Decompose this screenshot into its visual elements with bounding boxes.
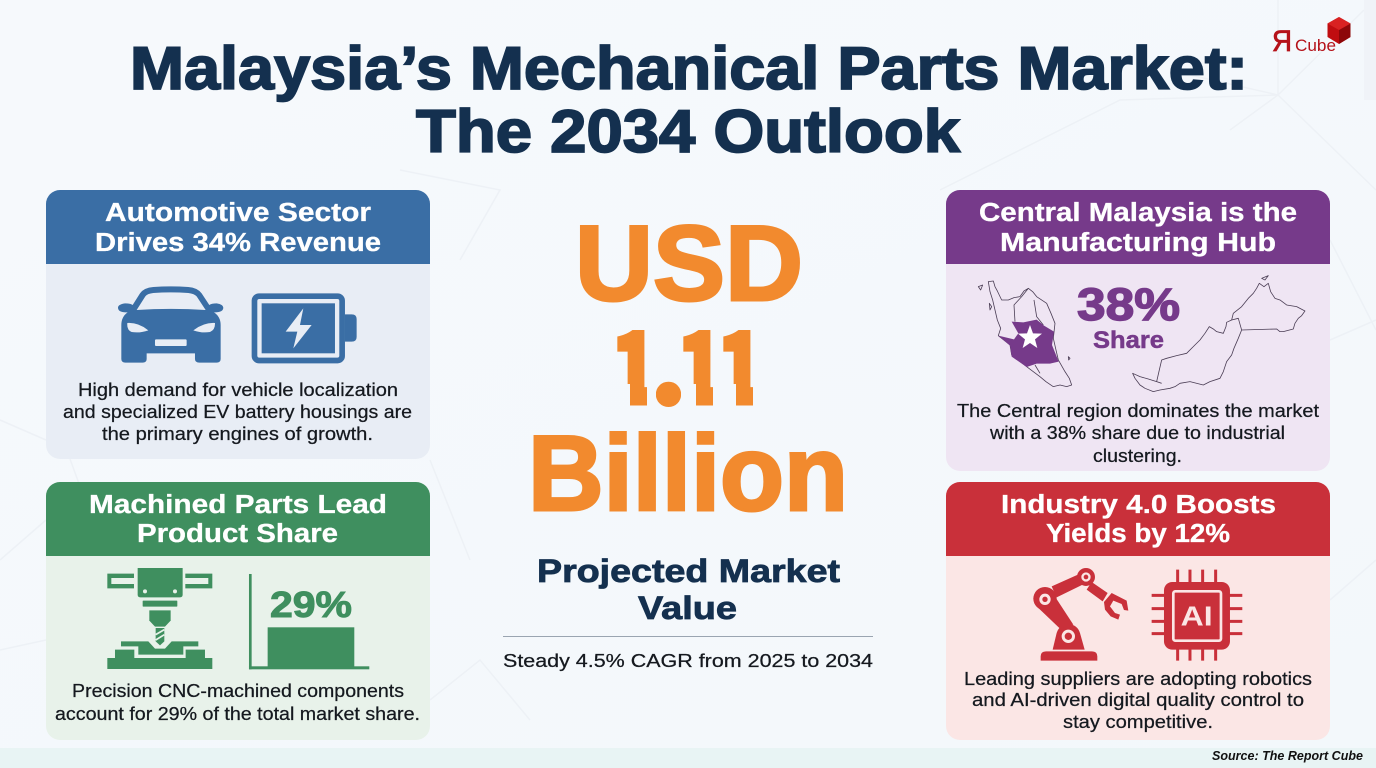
- headline figure: USD 1.11 Billion: 1: [718, 293, 763, 430]
- map: east malaysia: [1133, 276, 1305, 392]
- text: central description: with a 38% share due to industrial: [989, 422, 1285, 443]
- stat: 38% share: 38%: [1077, 279, 1180, 330]
- heading: industry 4.0: Yields by 12%: [1046, 520, 1230, 548]
- panel: central malaysia: [946, 190, 1330, 471]
- title: Malaysia’s Mechanical Parts Market:: [130, 35, 1248, 102]
- heading: machined parts: Product Share: [137, 520, 338, 548]
- subheading: projected market value: [537, 553, 840, 626]
- text: automotive description: the primary engines of growth.: [102, 423, 373, 444]
- footer band: [0, 748, 1376, 768]
- subheading: projected market value: Projected Market: [537, 553, 840, 589]
- headline figure: USD 1.11 Billion: 1: [678, 293, 723, 430]
- icon: battery: [252, 293, 357, 363]
- title: The 2034 Outlook: [416, 98, 961, 165]
- heading: machined parts: [89, 491, 387, 548]
- heading: industry 4.0: [1001, 491, 1276, 548]
- chart: 29% bar: 29%: [270, 584, 352, 625]
- subheading: projected market value: Value: [638, 590, 737, 626]
- text: automotive description: High demand for vehicle localization: [78, 379, 398, 400]
- text: machined description: [55, 680, 420, 724]
- logo: RCube: Cube: [1295, 36, 1336, 55]
- text: industry description: Leading suppliers are adopting robotics: [964, 668, 1312, 689]
- heading: central malaysia: Central Malaysia is the: [979, 199, 1297, 227]
- logo: RCube: Я: [1272, 25, 1292, 58]
- text: central description: [957, 400, 1319, 466]
- text: automotive description: [63, 379, 412, 444]
- heading: machined parts: Machined Parts Lead: [89, 491, 387, 519]
- text: machined description: Precision CNC-machined components: [72, 680, 404, 701]
- heading: automotive: Automotive Sector: [105, 199, 371, 227]
- text: industry description: and AI-driven digital quality control to: [972, 689, 1304, 710]
- panel: machined parts: [46, 482, 430, 740]
- heading: automotive: [95, 199, 381, 257]
- headline figure: USD 1.11 Billion: Billion: [528, 413, 848, 533]
- panel: automotive sector: [46, 190, 430, 459]
- headline figure: USD 1.11 Billion: 1: [612, 293, 657, 430]
- text: industry description: stay competitive.: [1063, 711, 1213, 732]
- headline figure: USD 1.11 Billion: [534, 224, 843, 512]
- source: Source: The Report Cube: [1212, 749, 1363, 763]
- heading: central malaysia: [979, 199, 1297, 257]
- headline figure: USD 1.11 Billion: .: [652, 293, 684, 430]
- map: peninsular malaysia: [978, 281, 1072, 387]
- text: automotive description: and specialized EV battery housings are: [63, 401, 412, 422]
- icon: car: [118, 286, 223, 363]
- heading: central malaysia: Manufacturing Hub: [1000, 229, 1276, 257]
- text: central description: The Central region dominates the market: [957, 400, 1319, 421]
- text: industry description: [964, 668, 1312, 732]
- text: CAGR: Steady 4.5% CAGR from 2025 to 2034: [503, 650, 873, 671]
- icon: AI chip: [1152, 570, 1242, 661]
- stat: 38% share: Share: [1093, 327, 1164, 354]
- heading: industry 4.0: Industry 4.0 Boosts: [1001, 491, 1276, 519]
- heading: automotive: Drives 34% Revenue: [95, 229, 381, 257]
- text: machined description: account for 29% of the total market share.: [55, 703, 420, 724]
- icon: AI chip: AI: [1181, 601, 1213, 632]
- text: central description: clustering.: [1093, 445, 1182, 466]
- headline figure: USD 1.11 Billion: USD: [575, 203, 803, 323]
- stat: 38% share: [1077, 279, 1180, 354]
- logo: RCube: [1272, 17, 1350, 58]
- title: [130, 35, 1248, 165]
- icon: CNC machine: [107, 568, 212, 669]
- panel: industry 4.0: [946, 482, 1330, 740]
- icon: robot arm: [1033, 568, 1128, 661]
- chart: 29% bar: [249, 574, 369, 669]
